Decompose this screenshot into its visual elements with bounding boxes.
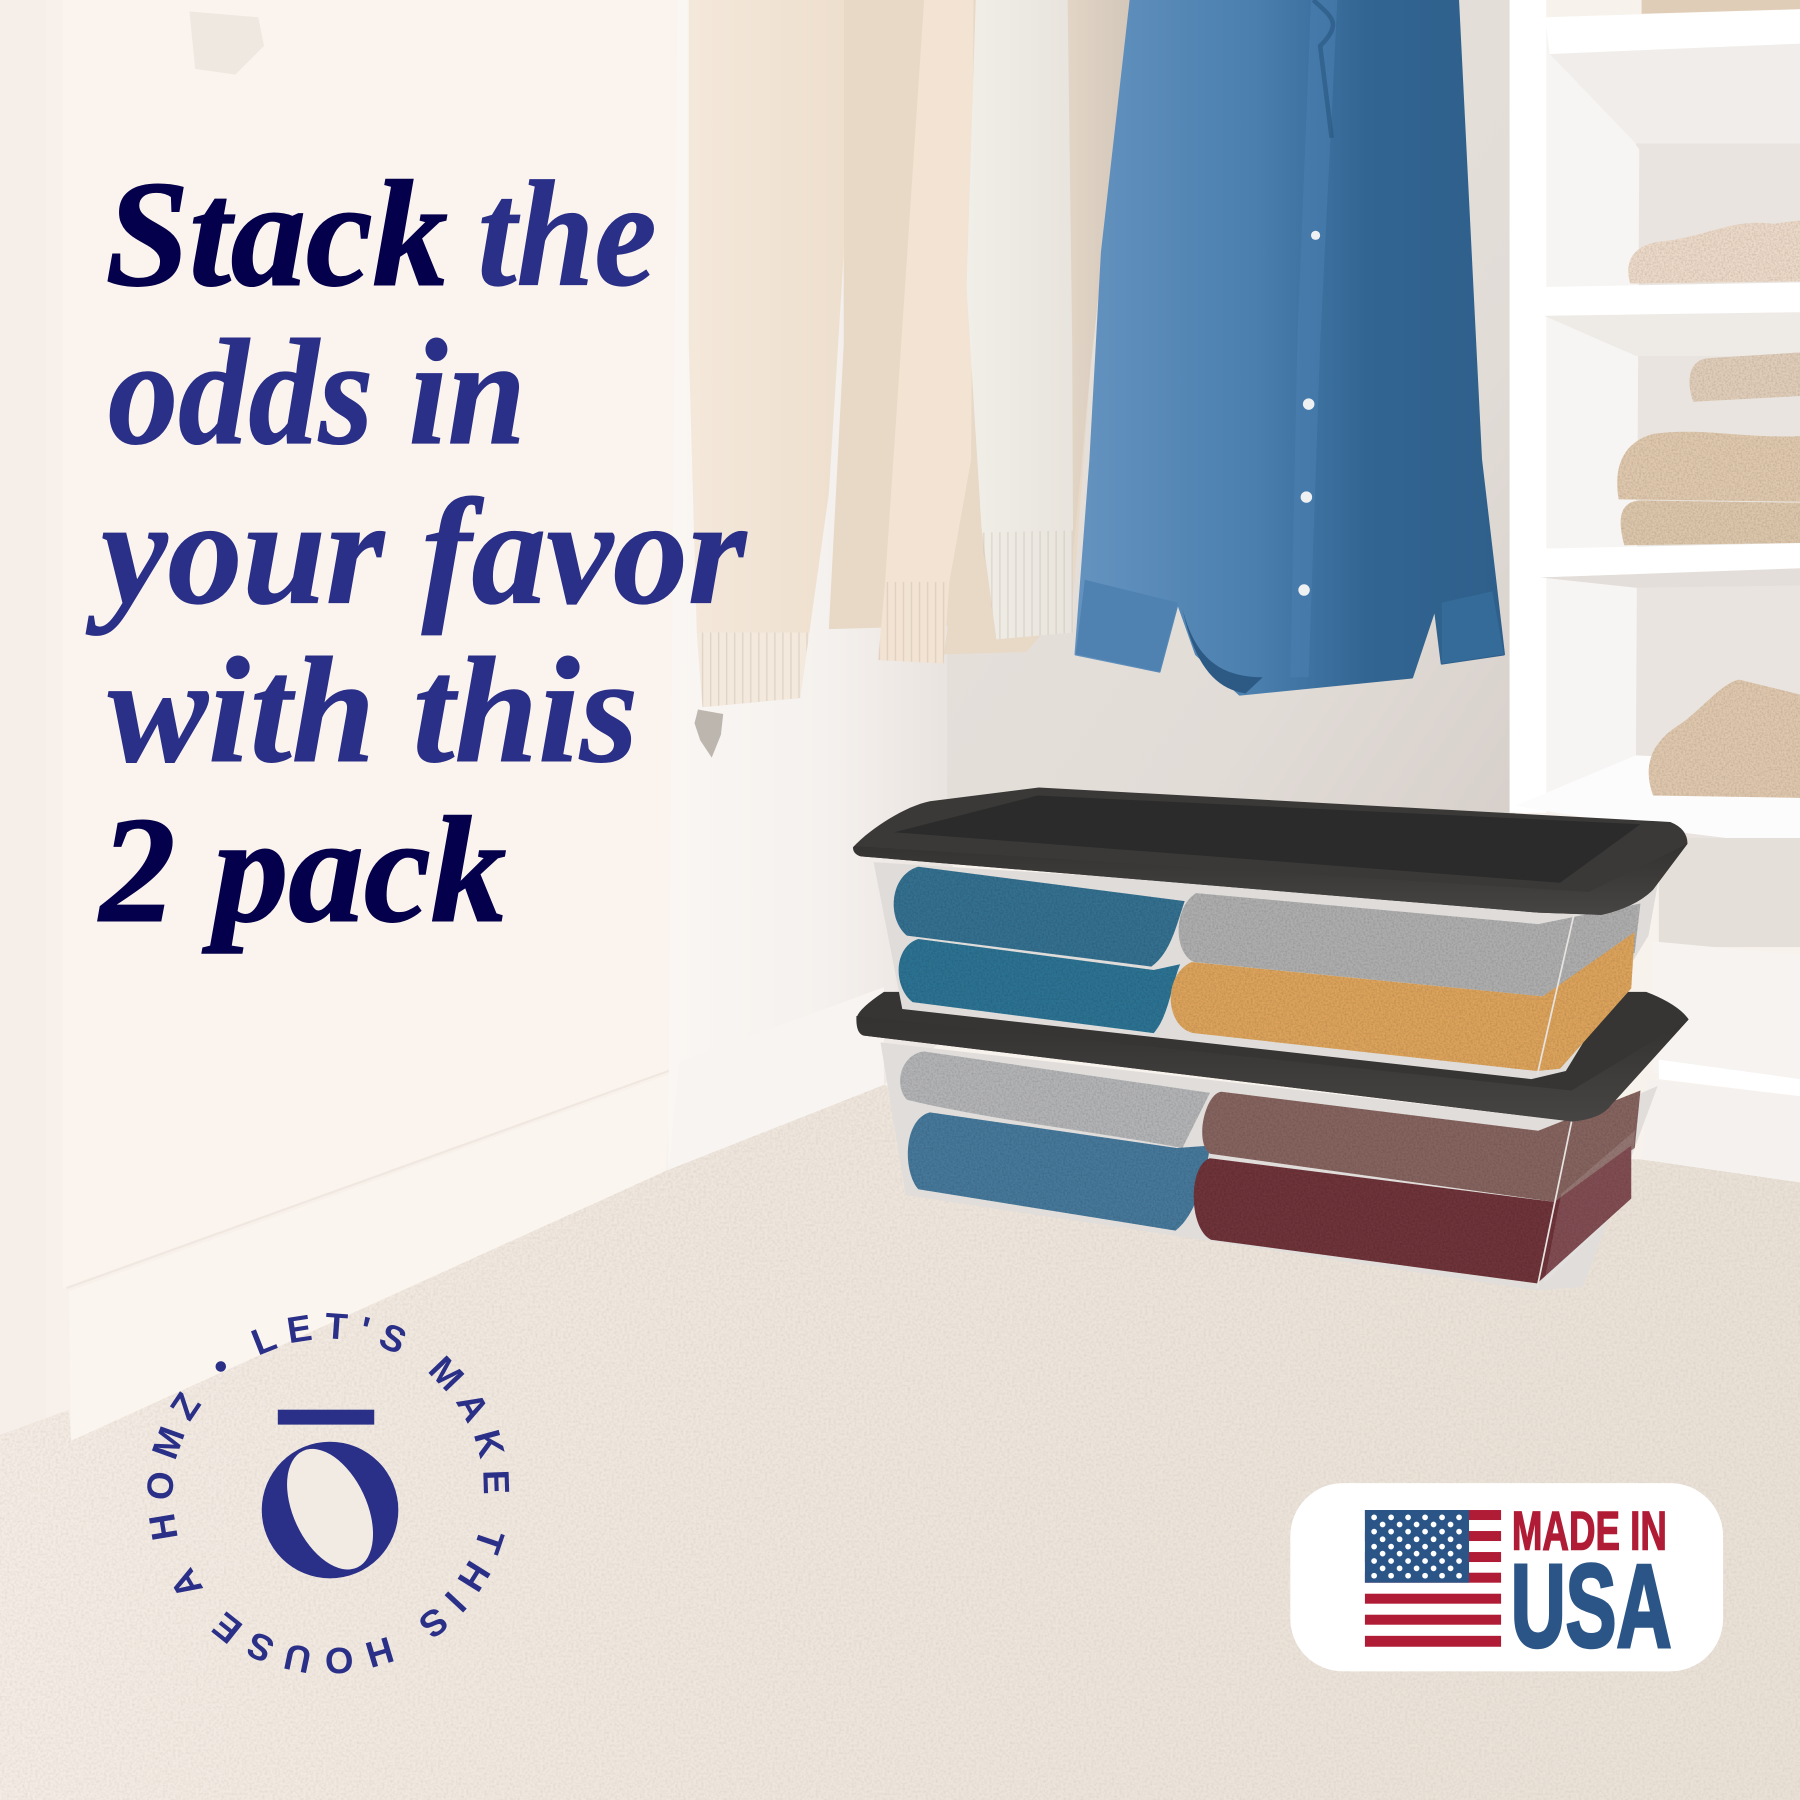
hanging clothes: [689, 0, 1504, 758]
lower blue sweater: [899, 939, 1180, 1033]
third shelf: [1538, 543, 1800, 588]
brand badge: [147, 1312, 510, 1674]
headline line: your favor: your favor: [85, 468, 748, 636]
logo mark: [262, 1410, 398, 1583]
storage boxes: [853, 788, 1689, 1290]
circular slogan: LET'S MAKE THIS HOUSE A HOMZ •: [147, 1312, 510, 1674]
top box lid: [853, 788, 1688, 915]
shelf back wall: [1636, 115, 1800, 849]
grey folded sweater: [900, 1052, 1210, 1148]
headline line: the: the: [478, 150, 657, 318]
lower shelf and cabinet: [1515, 755, 1800, 1182]
tan background garment: [829, 0, 1131, 654]
headline line: with this: with this: [108, 626, 638, 794]
mustard sweater: [1171, 932, 1635, 1071]
bottom box body: [880, 1042, 1658, 1290]
folded blankets on shelves: [1617, 220, 1800, 798]
brown folded sweater: [1202, 1091, 1640, 1202]
top shelf: [1545, 0, 1800, 143]
badge background: [1290, 1483, 1723, 1671]
beige sweater: [878, 0, 973, 664]
side wall: [668, 0, 953, 1171]
blue folded sweater: [908, 1112, 1210, 1231]
headline: [85, 150, 748, 954]
carpet: [0, 1079, 1800, 1800]
american flag: [1365, 1510, 1501, 1647]
bottom lid band: [856, 1016, 1689, 1122]
zipper pull: [695, 709, 723, 758]
made in USA badge: [1290, 1483, 1723, 1673]
side panel: [1544, 23, 1639, 809]
headline line: Stack: Stack: [106, 150, 448, 318]
denim shirt: [1076, 0, 1504, 695]
baseboard: [668, 987, 884, 1171]
cream cardigan: [689, 0, 844, 707]
shelving unit: [1510, 0, 1800, 1182]
bottom box lid: [856, 992, 1689, 1122]
top box body: [874, 862, 1660, 1079]
second shelf: [1542, 282, 1800, 356]
made in text: MADE IN: [1512, 1500, 1667, 1562]
back wall: [947, 0, 1515, 827]
headline line: odds in: odds in: [108, 308, 526, 476]
white sweater: [967, 0, 1074, 639]
maroon folded sweater: [1194, 1146, 1631, 1283]
headline line: 2 pack: 2 pack: [98, 786, 506, 954]
usa text: USA: [1511, 1541, 1671, 1673]
upright: [1510, 0, 1546, 813]
left wall panel: [0, 0, 689, 1492]
upper blue sweater: [894, 867, 1185, 967]
grey sweater: [1179, 893, 1640, 996]
